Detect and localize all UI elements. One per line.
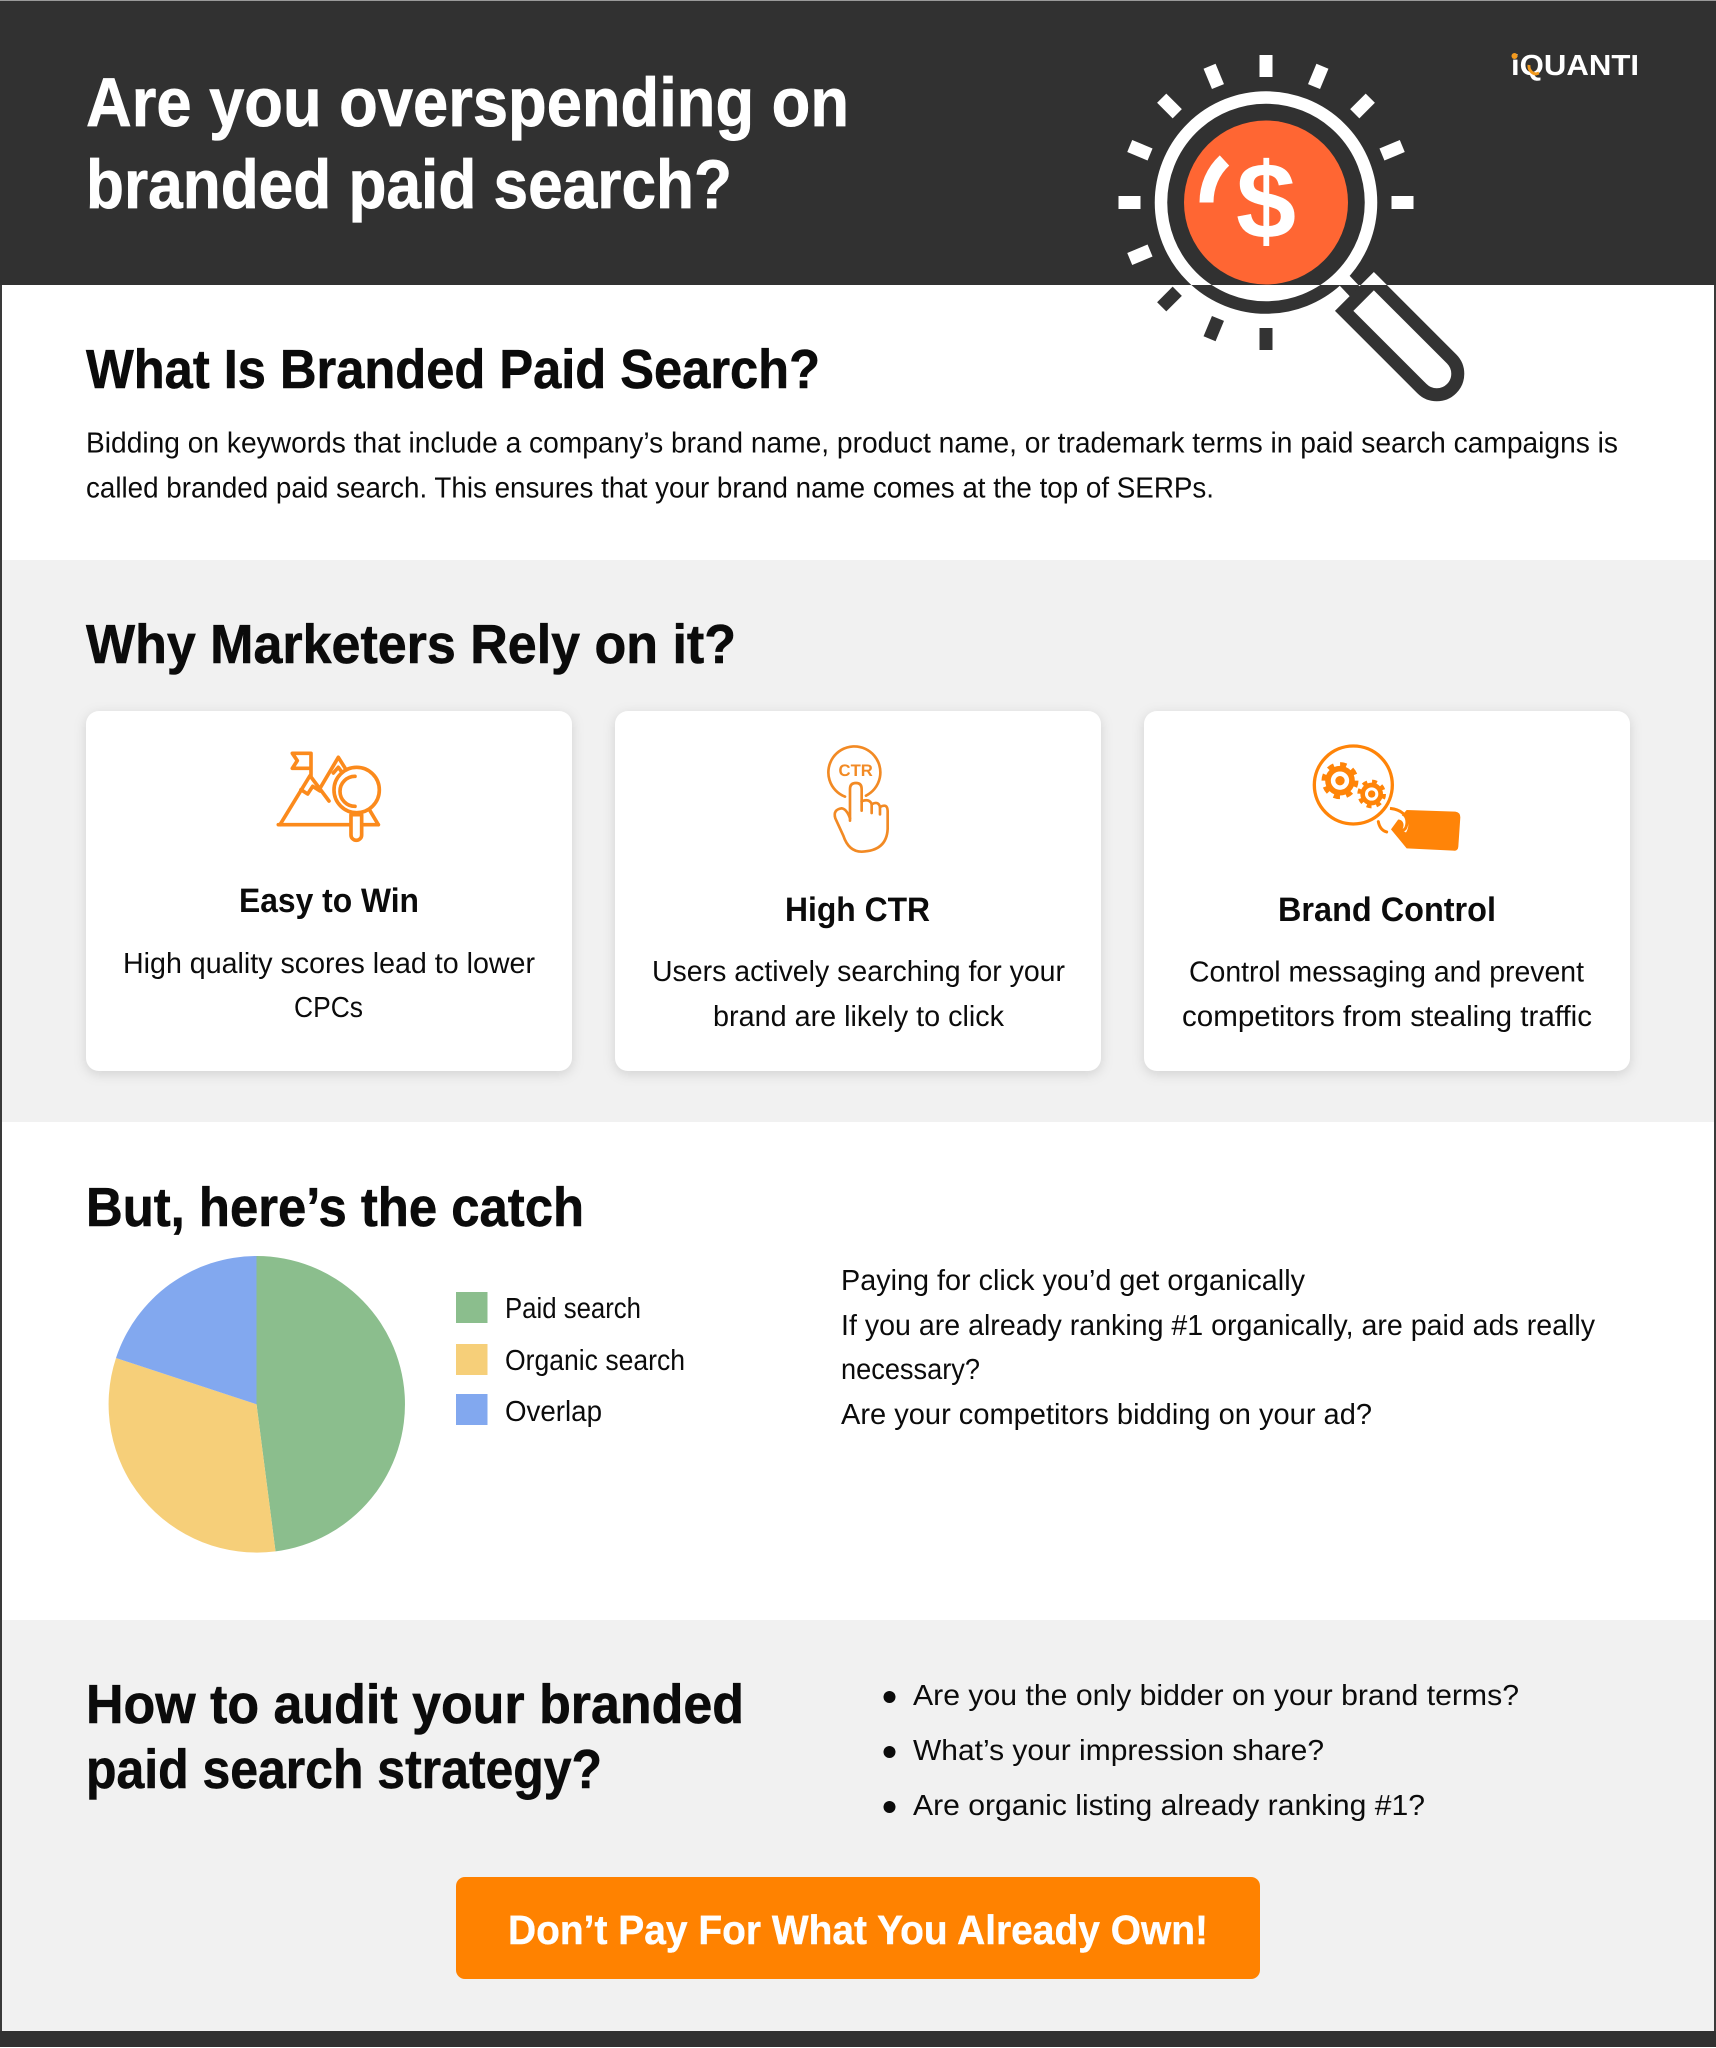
- card title: High CTR: [785, 891, 930, 929]
- bullet list: Are organic listing already ranking #1?: [913, 1790, 1425, 1822]
- text block: catch questions: If you are already ranking #1 organically, are paid ads really: [841, 1310, 1595, 1342]
- top edge line: [0, 0, 1716, 1]
- text block: catch questions: necessary?: [841, 1354, 980, 1386]
- card description: CPCs: [294, 992, 363, 1024]
- legend: [456, 1292, 685, 1428]
- card description: [652, 956, 1065, 1033]
- panel: header band: [0, 0, 1716, 285]
- card description: [123, 948, 535, 1024]
- legend: Paid search: [505, 1293, 641, 1325]
- card: high CTR: [615, 711, 1101, 1071]
- panel: how to audit: [0, 1620, 1716, 2031]
- call to action button: Don’t Pay For What You Already Own!: [508, 1907, 1208, 1953]
- icon: CTR button and pointing hand: CTR: [839, 761, 873, 780]
- legend: Overlap: [505, 1396, 602, 1428]
- title: branded paid search?: [86, 146, 732, 223]
- icon: CTR button and pointing hand: [828, 746, 888, 852]
- title: [86, 64, 849, 223]
- card description: Users actively searching for your: [652, 956, 1065, 988]
- panel: what is branded paid search: [86, 338, 1618, 504]
- call to action button: [456, 1877, 1260, 1979]
- body text: [86, 428, 1618, 504]
- body text: Bidding on keywords that include a company’s brand name, product name, or trademark terms in paid search campaigns is: [86, 428, 1618, 460]
- panel: but here's the catch: [86, 1176, 1595, 1553]
- heading: How to audit your branded: [86, 1673, 744, 1735]
- card description: competitors from stealing traffic: [1182, 1001, 1592, 1033]
- heading: Why Marketers Rely on it?: [86, 613, 736, 675]
- text block: catch questions: Are your competitors bidding on your ad?: [841, 1399, 1372, 1431]
- card description: Control messaging and prevent: [1189, 956, 1584, 988]
- heading: [86, 1673, 744, 1800]
- title: Are you overspending on: [86, 64, 849, 141]
- card: easy to win: [86, 711, 572, 1071]
- bullet list: [884, 1680, 1519, 1822]
- heading: paid search strategy?: [86, 1738, 602, 1800]
- icon: gears in lens with price tag: [1314, 746, 1460, 851]
- icon: mountain, flag and magnifier: [278, 753, 379, 840]
- bullet list: Are you the only bidder on your brand terms?: [913, 1680, 1519, 1712]
- card description: [1182, 956, 1592, 1033]
- card title: Brand Control: [1278, 891, 1496, 929]
- panel: why marketers rely on it: [0, 560, 1716, 1122]
- legend: Organic search: [505, 1345, 685, 1377]
- icon: magnifying glass with dollar sign: $: [1236, 140, 1296, 261]
- heading: But, here’s the catch: [86, 1176, 584, 1238]
- card title: Easy to Win: [239, 882, 419, 920]
- footer band: [0, 2031, 1716, 2047]
- card description: High quality scores lead to lower: [123, 948, 535, 980]
- body text: called branded paid search. This ensures that your brand name comes at the top of SERPs.: [86, 472, 1214, 504]
- logo: iQUANTI: iQUANTI: [1511, 50, 1639, 82]
- icon: magnifying glass with dollar sign: [1118, 55, 1466, 403]
- bullet list: What’s your impression share?: [913, 1735, 1324, 1767]
- text block: catch questions: Paying for click you’d get organically: [841, 1265, 1305, 1297]
- text block: catch questions: [841, 1265, 1595, 1431]
- pie chart: [109, 1256, 405, 1553]
- card description: brand are likely to click: [713, 1001, 1004, 1033]
- card: brand control: [1144, 711, 1630, 1071]
- heading: What Is Branded Paid Search?: [86, 338, 820, 400]
